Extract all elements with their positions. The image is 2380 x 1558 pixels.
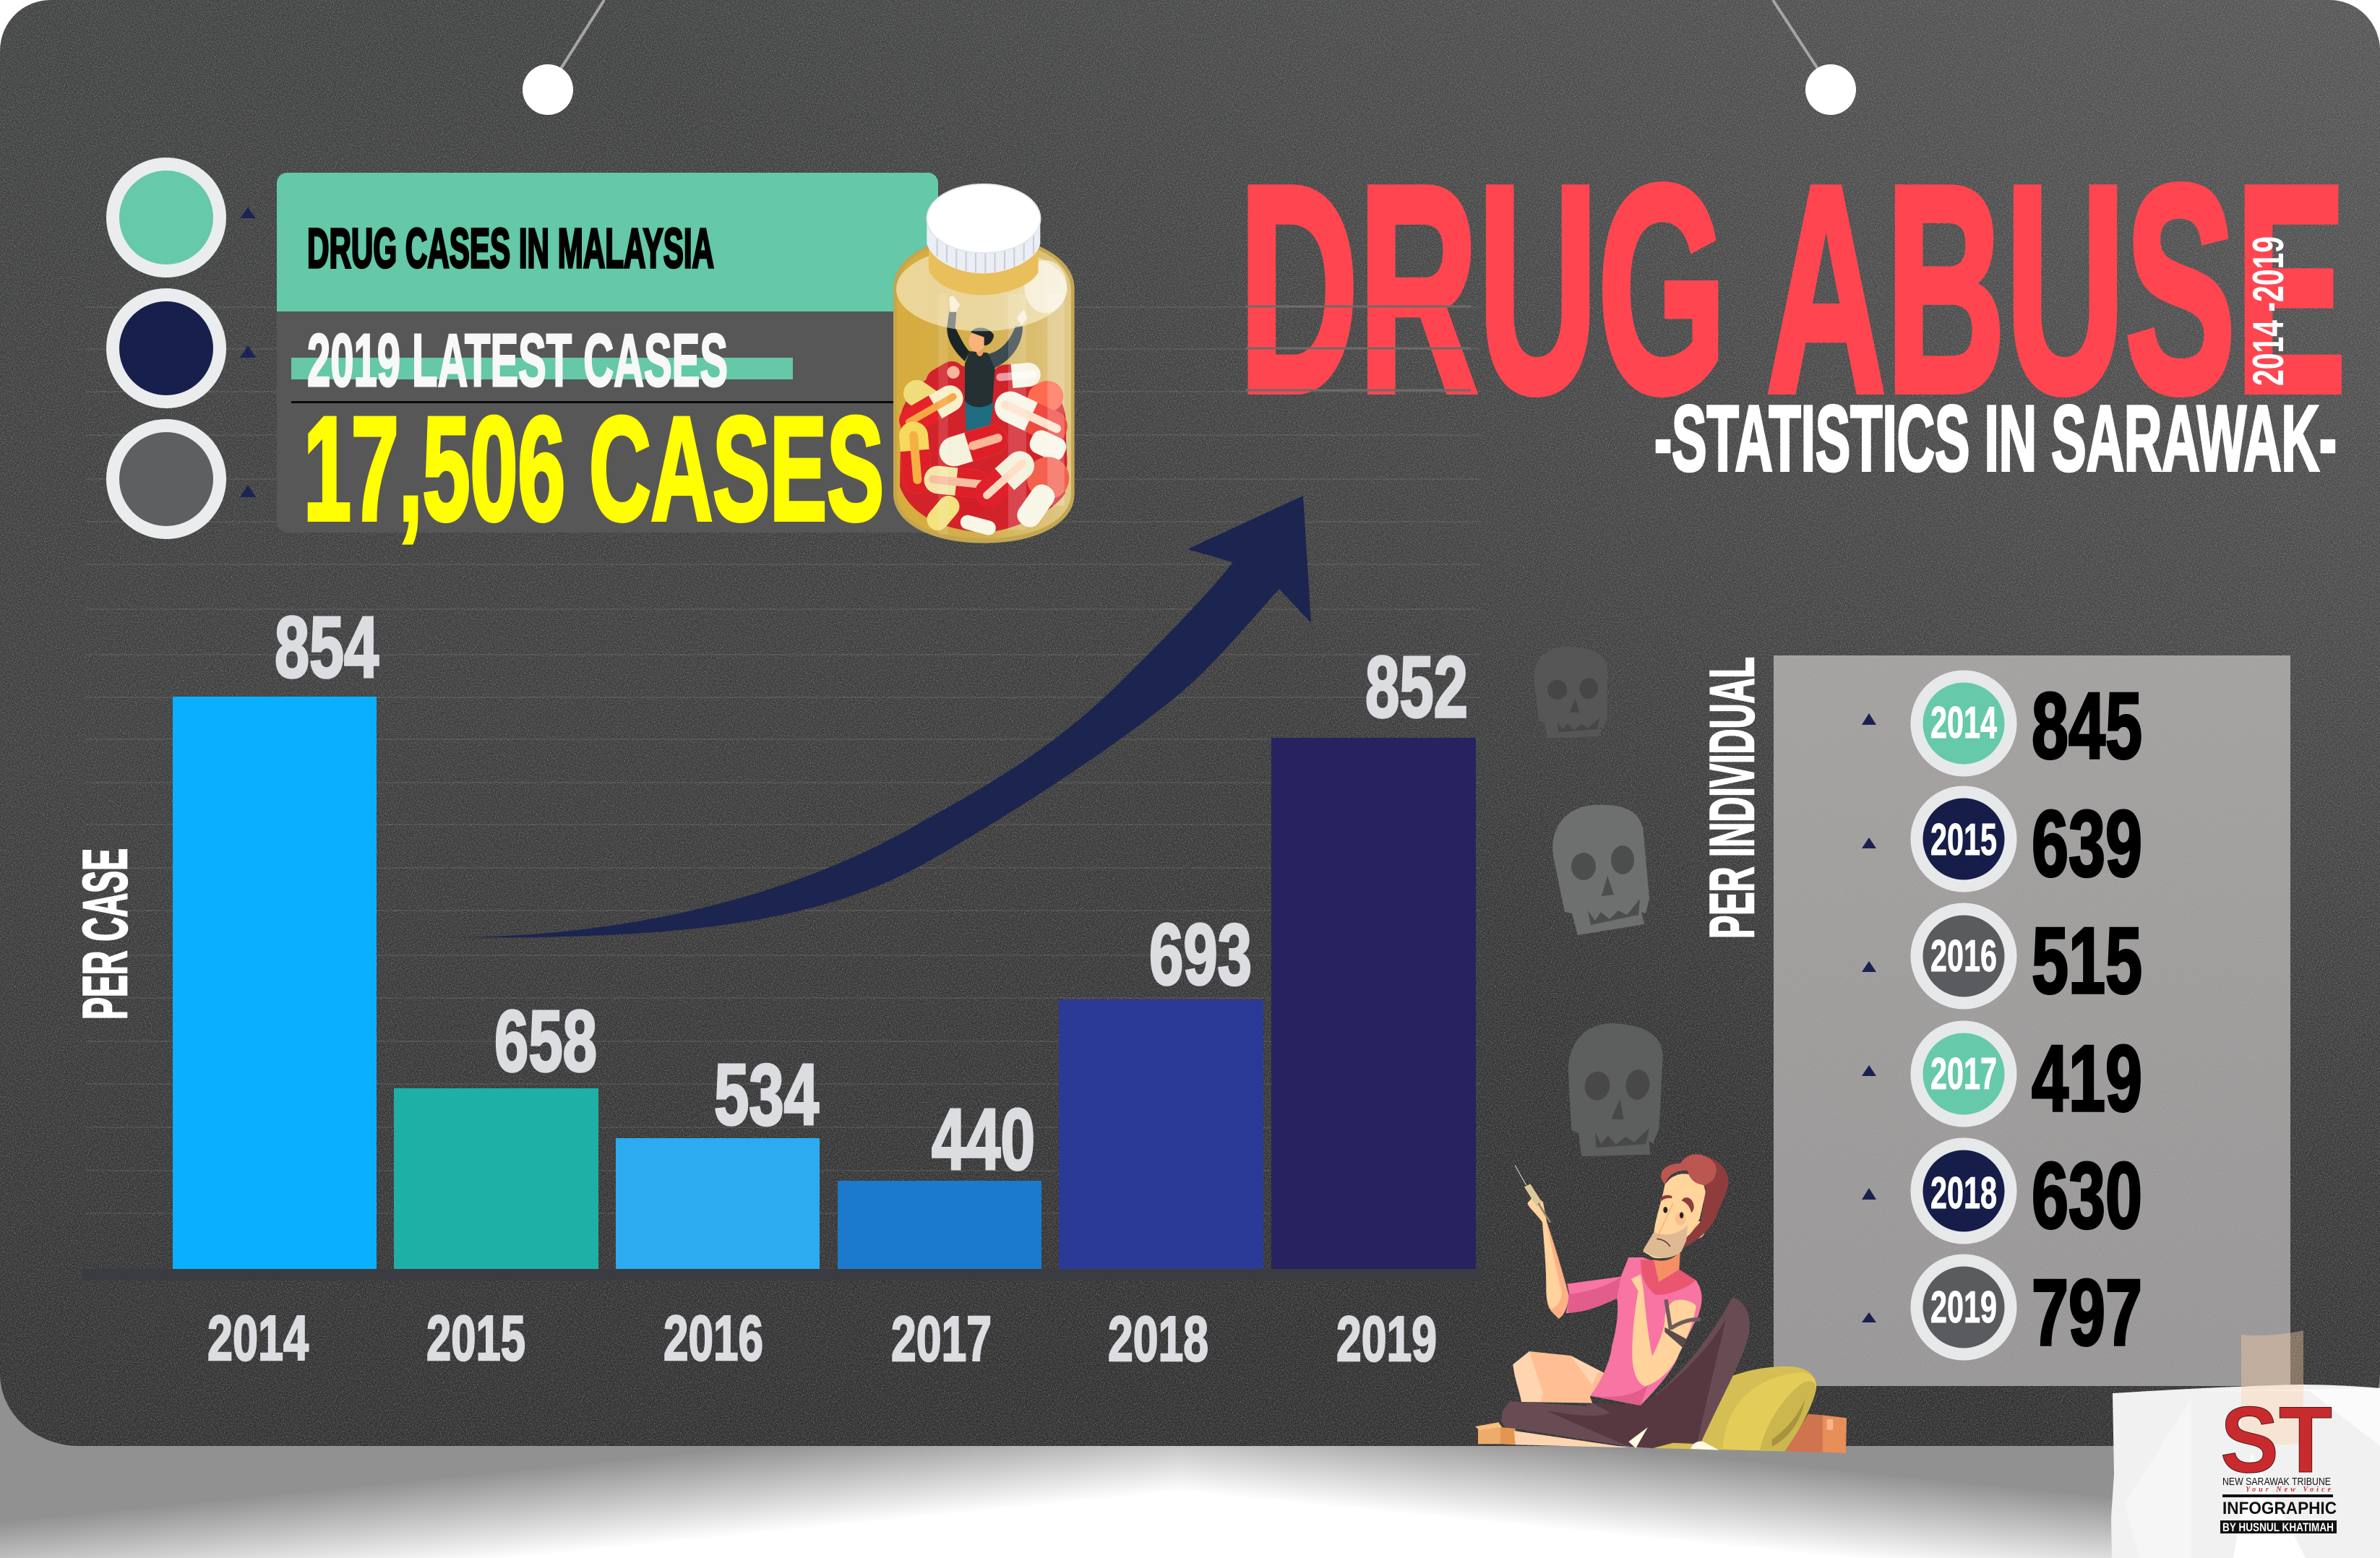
row 2018 xyxy=(1862,1142,2142,1248)
legend dots with triangles xyxy=(113,164,256,533)
paper sheet xyxy=(2111,1385,2380,1558)
bar 2018: 2018 xyxy=(1108,1303,1208,1374)
icon: pill bottle with trapped man xyxy=(893,184,1075,543)
bar 2016: 2016 xyxy=(663,1302,763,1374)
bar chart: cases per year xyxy=(82,599,1482,1374)
axis label: per individual: PER INDIVIDUAL xyxy=(1698,657,1767,939)
axis label: per case: PER CASE xyxy=(71,848,140,1020)
row 2014 xyxy=(1862,673,2142,778)
bar 2014: 2014 xyxy=(207,1302,309,1374)
taped paper logo note xyxy=(2111,1330,2380,1558)
row 2016 xyxy=(1862,908,2142,1013)
logo: rule xyxy=(2222,1494,2333,1497)
bar 2019: 852 xyxy=(1365,639,1468,736)
row 2019: 2019 xyxy=(1930,1283,1997,1333)
logo: ST wordmark: ST xyxy=(2220,1387,2332,1492)
row 2018: 630 xyxy=(2032,1142,2142,1248)
row 2015: 2015 xyxy=(1930,815,1997,865)
row 2016: 515 xyxy=(2032,908,2142,1013)
illustration: seated man with syringe xyxy=(1475,1154,1847,1453)
row 2017: 2017 xyxy=(1930,1049,1997,1099)
divider line xyxy=(291,401,898,403)
row 2019 xyxy=(1862,1260,2142,1365)
row 2015: 639 xyxy=(2032,791,2142,896)
row 2017: 419 xyxy=(2032,1025,2142,1131)
heading: drug cases in Malaysia: DRUG CASES IN MALAYSIA xyxy=(307,218,714,280)
bar 2017 xyxy=(838,1091,1041,1374)
arrow: rising trend xyxy=(448,496,1311,937)
tape strip xyxy=(2241,1330,2303,1445)
floor shadow beneath the board xyxy=(0,1337,2380,1558)
bar 2015: 2015 xyxy=(426,1302,525,1374)
highlight bar xyxy=(291,358,793,379)
row 2015 xyxy=(1862,791,2142,896)
panel green header xyxy=(277,173,938,311)
row 2017 xyxy=(1862,1025,2142,1131)
logo: infographic label: INFOGRAPHIC xyxy=(2222,1499,2337,1518)
bar 2016 xyxy=(616,1046,820,1374)
chart baseline xyxy=(82,1269,1482,1281)
big number: 17,506 cases: 17,506 CASES xyxy=(304,387,884,551)
bar 2014: 854 xyxy=(275,599,379,696)
panel background xyxy=(1774,655,2290,1386)
date range vertical label: 2014 -2019 xyxy=(2244,236,2293,386)
hanging pin left xyxy=(523,0,604,115)
row 2016: 2016 xyxy=(1930,931,1997,981)
bar 2018: 693 xyxy=(1149,906,1252,1003)
logo: credit: BY HUSNUL KHATIMAH xyxy=(2222,1520,2334,1534)
logo: tagline: Your New Voice xyxy=(2246,1486,2332,1494)
bar 2019 xyxy=(1271,639,1476,1374)
panel lower background xyxy=(277,311,938,533)
bar 2018 xyxy=(1059,906,1263,1374)
bar 2017: 2017 xyxy=(891,1303,992,1374)
bar 2016: 534 xyxy=(714,1046,819,1143)
row 2019: 797 xyxy=(2032,1260,2142,1365)
trapped man xyxy=(947,296,1028,431)
bar 2019: 2019 xyxy=(1336,1303,1437,1374)
panel: per individual figures xyxy=(1774,655,2290,1386)
bar 2015: 658 xyxy=(494,993,597,1090)
bar 2015 xyxy=(394,993,598,1374)
bar 2017: 440 xyxy=(932,1091,1035,1188)
row 2018: 2018 xyxy=(1930,1168,1997,1218)
subheading: 2019 latest cases: 2019 LATEST CASES xyxy=(307,319,728,402)
hanging pin right xyxy=(1773,0,1856,115)
row 2014: 2014 xyxy=(1930,698,1997,748)
logo: newspaper name: NEW SARAWAK TRIBUNE xyxy=(2222,1476,2331,1488)
row 2014: 845 xyxy=(2032,673,2142,778)
icon: faded skulls xyxy=(1528,643,1672,1166)
panel: Malaysia cases xyxy=(277,173,938,551)
bar 2014 xyxy=(173,599,379,1374)
